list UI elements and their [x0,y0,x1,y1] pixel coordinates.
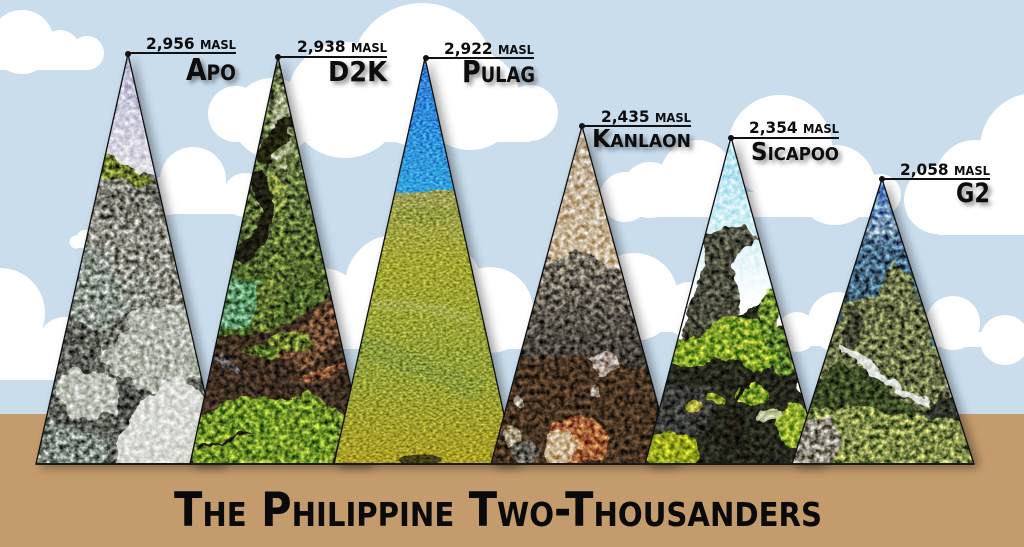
cloud: upper right [904,93,1024,235]
label: Pulag: PULAG [462,55,535,90]
label: Kanlaon: KANLAON [592,124,691,153]
cloud: lower right [926,296,1024,365]
label: Apo [125,34,236,88]
label: D2K: D2K [328,55,388,88]
label: G2: G2 [956,178,990,209]
label: D2K: 2,938 MASL [297,37,387,56]
label: G2: 2,058 MASL [900,160,990,179]
label: D2K [275,37,388,88]
mountain: Sicapoo [644,134,830,474]
clouds [0,3,1024,380]
cloud: behind Pulag lower [280,235,548,353]
mountain: D2K [190,60,376,474]
label: Pulag: 2,922 MASL [444,39,534,58]
cloud: large behind D2K and Pulag [208,3,558,158]
cloud: lower left [0,268,93,380]
label: Sicapoo: SICAPOO [751,137,839,166]
mountain: Pulag [325,50,525,480]
ground [0,414,1024,547]
label: Apo: 2,956 MASL [146,34,236,53]
mountain: Apo [35,56,230,474]
title: THE PHILIPPINE TWO-THOUSANDERS [174,483,822,538]
cloud: top left [0,10,104,74]
cloud: small left of Apo [70,230,98,248]
label: Kanlaon: 2,435 MASL [601,107,691,126]
label: Sicapoo [728,118,839,166]
label: G2 [879,160,990,209]
base line [36,463,974,465]
cloud: behind Kanlaon and Sicapoo lower [590,253,718,341]
mountain: Kanlaon [490,128,682,474]
cloud: behind Apo and D2K [148,147,267,217]
cloud: behind Kanlaon and Sicapoo upper [600,95,901,225]
cloud: behind Sicapoo and G2 [777,292,868,352]
label: Sicapoo: 2,354 MASL [749,118,839,137]
label: Pulag [423,39,535,90]
label: Apo: APO [186,53,236,88]
mountain: G2 [792,180,983,474]
label: Kanlaon [579,107,691,153]
